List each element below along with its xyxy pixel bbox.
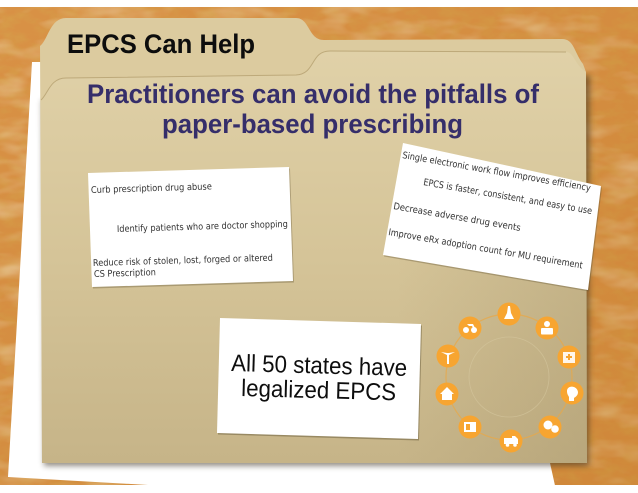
folder front panel bbox=[41, 51, 587, 463]
panel: EPCS legal callout card: legalized EPCS bbox=[241, 375, 397, 406]
title: EPCS Can Help bbox=[67, 29, 255, 59]
white strip bottom bbox=[148, 485, 638, 493]
icon: stethoscope bbox=[458, 316, 482, 340]
icon: hospital bbox=[558, 346, 580, 368]
heading: paper-based prescribing bbox=[162, 109, 463, 139]
panel: left note card: Curb prescription drug abuse bbox=[91, 181, 212, 196]
panel: right note card: Decrease adverse drug events bbox=[392, 201, 522, 234]
panel: EPCS legal callout card: All 50 states have bbox=[231, 350, 408, 382]
panel: right note card bbox=[383, 143, 602, 292]
icon ring bbox=[436, 302, 584, 452]
panel: right note card: Improve eRx adoption count for MU requirement bbox=[387, 227, 584, 272]
panel: right note card: EPCS is faster, consistent, and easy to use bbox=[422, 177, 593, 217]
heading bbox=[87, 79, 540, 139]
panel: EPCS legal callout card bbox=[217, 318, 422, 440]
panel: right note card: Single electronic work flow improves efficiency bbox=[401, 150, 592, 194]
folder back tab bbox=[40, 18, 586, 463]
folder shadow bbox=[42, 75, 590, 466]
icon: microscope bbox=[498, 302, 520, 326]
icon: coins bbox=[538, 416, 562, 438]
icon: x-ray card bbox=[458, 416, 482, 438]
panel: left note card bbox=[88, 167, 294, 288]
white paper behind folder bbox=[8, 62, 560, 493]
panel: left note card: CS Prescription bbox=[94, 267, 156, 280]
panel: left note card: Reduce risk of stolen, lost, forged or altered bbox=[93, 253, 273, 269]
icon: ambulance bbox=[500, 430, 522, 452]
icon: doctor bbox=[536, 316, 558, 340]
heading: Practitioners can avoid the pitfalls of bbox=[87, 79, 540, 109]
icon: house bbox=[436, 382, 458, 406]
icon: caduceus bbox=[436, 344, 460, 368]
icon: head bbox=[560, 382, 584, 404]
folder bbox=[40, 18, 590, 466]
panel: left note card: Identify patients who are doctor shopping bbox=[117, 219, 288, 235]
